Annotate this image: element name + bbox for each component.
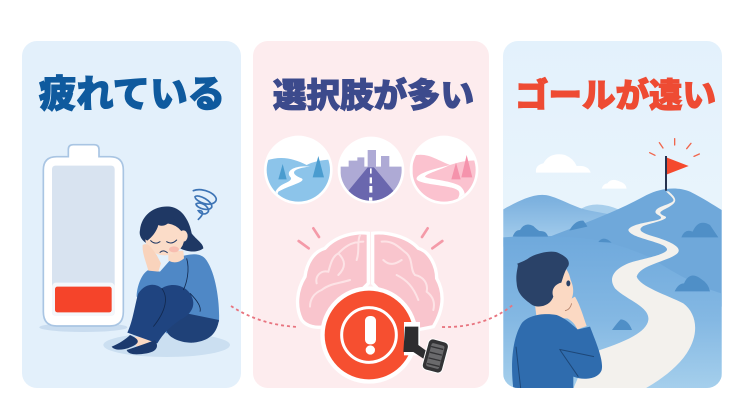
low charge bar — [55, 287, 112, 312]
heading: many choices: 選択肢が多い — [273, 77, 474, 115]
mountains — [503, 188, 722, 389]
dotted connector: right — [442, 304, 514, 327]
choice: river valley — [263, 136, 333, 207]
illustration: mountain road to flag — [503, 139, 722, 389]
dizzy swirl — [193, 190, 216, 219]
choice: pink path — [410, 136, 478, 207]
heading: tired: 疲れている — [39, 73, 225, 115]
clouds — [536, 154, 627, 189]
panel: many choices — [253, 41, 489, 388]
brain — [298, 228, 442, 330]
man thinking — [512, 252, 602, 389]
choice: city road — [338, 137, 404, 207]
winding road — [573, 191, 695, 389]
panel: tired — [22, 41, 241, 388]
alert icon with brake pedal — [320, 286, 449, 384]
dotted connector: left — [231, 306, 298, 327]
infographic — [22, 41, 722, 388]
illustration: battery and tired woman — [39, 145, 230, 357]
panel: goal is far — [503, 41, 722, 389]
battery — [39, 145, 127, 332]
bushes — [513, 221, 718, 330]
heading: goal is far: ゴールが遠い — [515, 77, 716, 115]
woman — [103, 206, 230, 357]
illustration: choices and brain — [263, 136, 478, 384]
goal flag — [650, 139, 699, 191]
